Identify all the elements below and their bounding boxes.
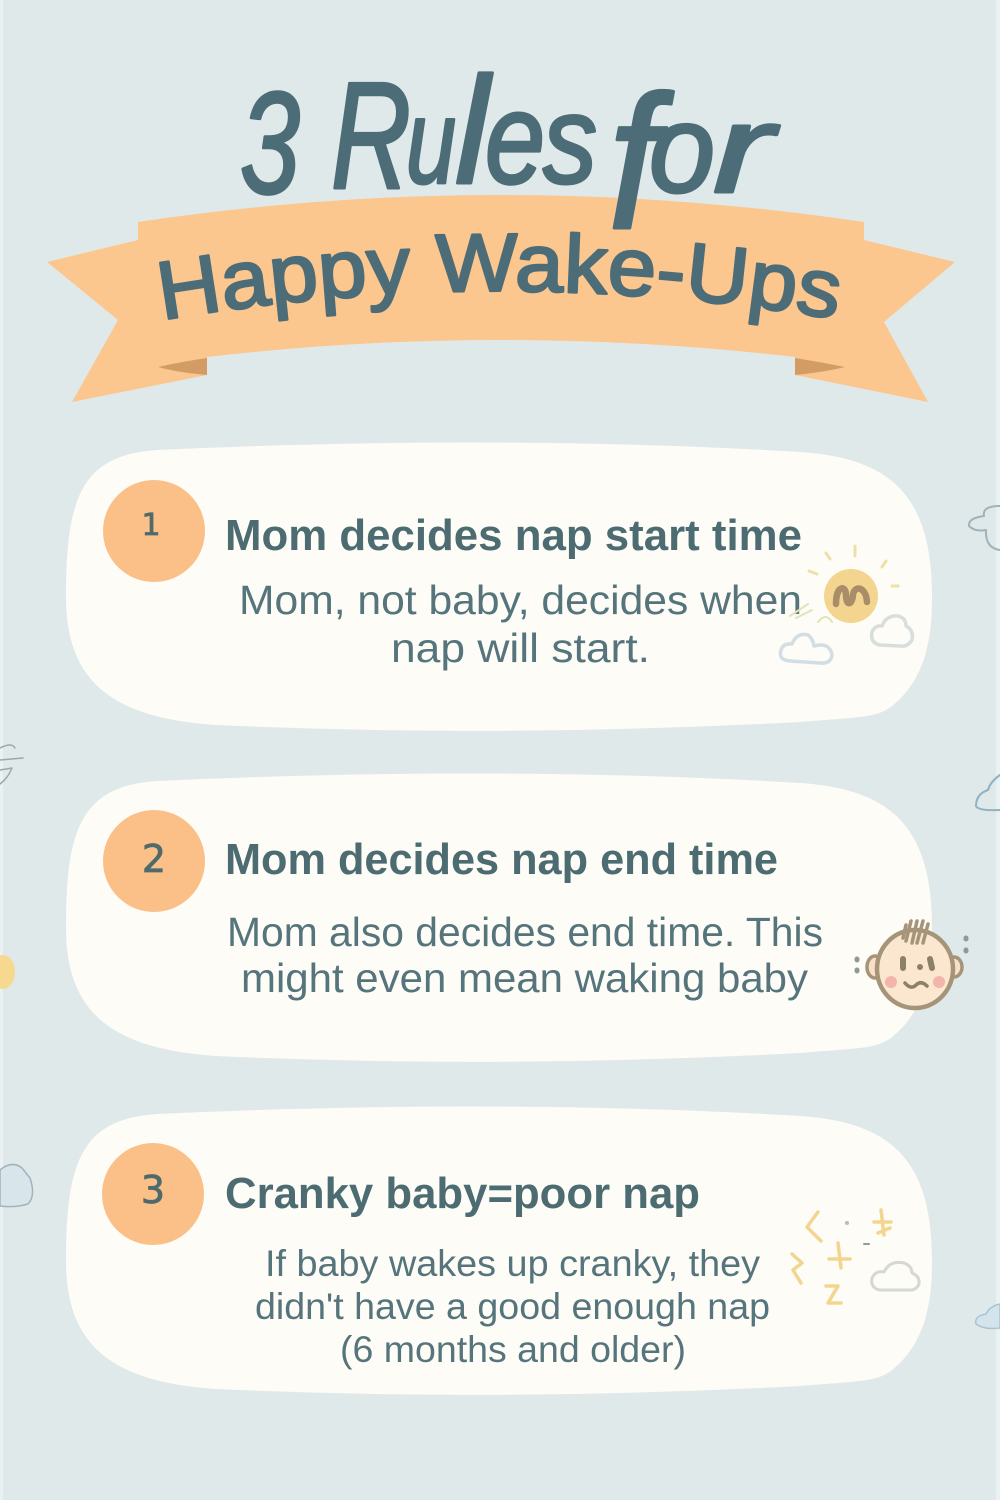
- card background: [66, 773, 932, 1062]
- heading: Cranky baby=poor nap: [225, 1169, 700, 1218]
- heading: Mom decides nap start time: [225, 511, 802, 560]
- title: 3 Rules for: R: [331, 51, 411, 221]
- icon: baby face: [857, 921, 966, 1008]
- icon: edge cloud top right: [969, 506, 1000, 550]
- number badge 2: [103, 810, 205, 912]
- icon: edge cloud lower right: [976, 1304, 1000, 1328]
- icon: edge cloud mid right: [976, 775, 1000, 810]
- heading: Mom decides nap end time: [225, 835, 778, 884]
- icon: edge sun left: [0, 955, 15, 989]
- number badge 3: [102, 1143, 204, 1245]
- number badge 1: 1: [141, 508, 161, 543]
- description: didn't have a good enough nap: [255, 1286, 770, 1327]
- panel: rule 1: [66, 442, 932, 731]
- description: [255, 1243, 770, 1370]
- title: 3 Rules for: l: [455, 46, 493, 216]
- title: 3 Rules for: 3: [240, 62, 300, 224]
- description: (6 months and older): [340, 1329, 686, 1370]
- description: Mom also decides end time. This: [227, 909, 823, 955]
- card background: [66, 1106, 932, 1395]
- ribbon banner: [47, 195, 955, 402]
- icon: cranky squiggles and cloud: [792, 1210, 919, 1303]
- number badge 1: [103, 480, 205, 582]
- card background: [66, 442, 932, 731]
- panel: rule 2: [66, 773, 966, 1062]
- icon: edge cloud lower left: [0, 1164, 33, 1207]
- title: 3 Rules for: s: [543, 71, 597, 210]
- banner heading: Happy Wake-Ups: Happy Wake-Ups: [159, 232, 840, 326]
- title: 3 Rules for: f: [608, 57, 674, 269]
- title: 3 Rules for: e: [485, 65, 545, 211]
- icon: edge bird upper left: [0, 745, 23, 784]
- title: 3 Rules for: u: [406, 75, 456, 209]
- title: 3 Rules for: [240, 46, 779, 269]
- icon: sun with clouds: [780, 546, 912, 663]
- description: [239, 577, 802, 671]
- description: Mom, not baby, decides when: [239, 577, 802, 623]
- number badge 3: 3: [141, 1168, 165, 1212]
- number badge 2: 2: [142, 837, 166, 881]
- title: 3 Rules for: r: [713, 80, 779, 219]
- description: [227, 909, 823, 1001]
- panel: rule 3: [66, 1106, 932, 1395]
- description: might even mean waking baby: [241, 955, 809, 1001]
- description: If baby wakes up cranky, they: [265, 1243, 761, 1284]
- description: nap will start.: [391, 625, 650, 671]
- title: 3 Rules for: o: [649, 80, 715, 219]
